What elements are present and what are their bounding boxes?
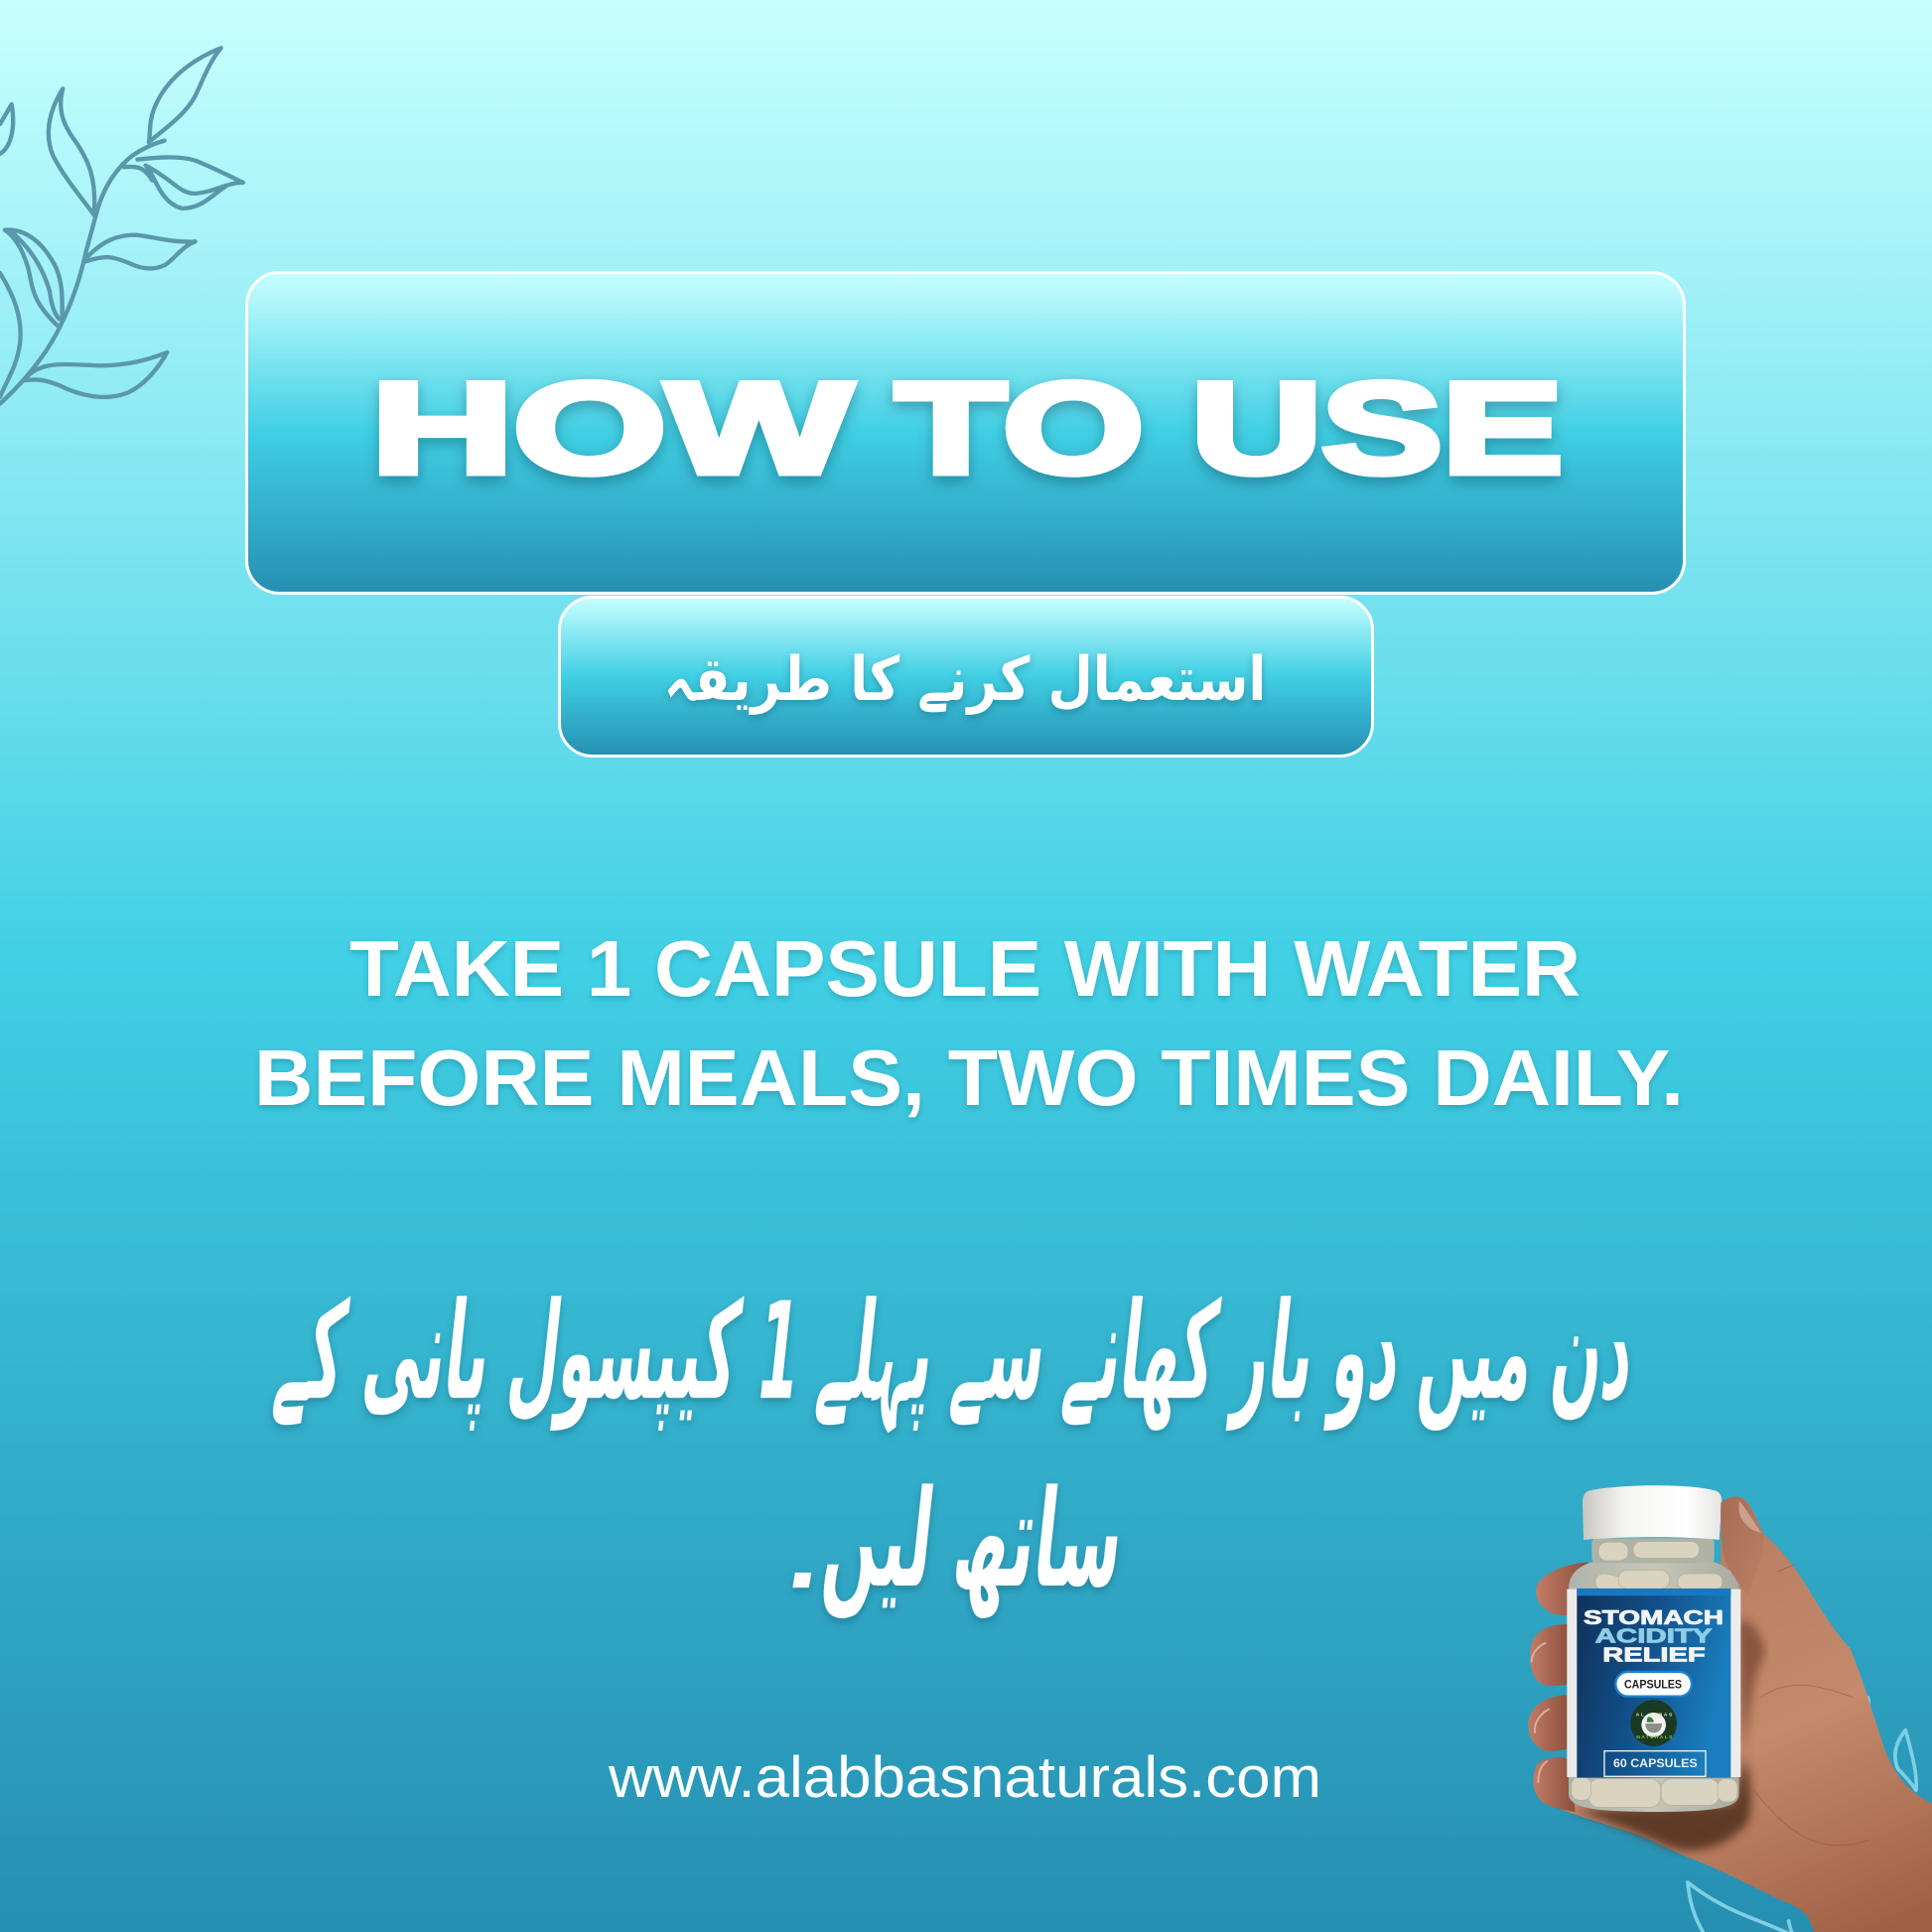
finger four [1533, 1757, 1576, 1812]
thumb nail [1739, 1501, 1761, 1533]
finger three [1528, 1695, 1571, 1751]
label box: 60 capsules: 60 CAPSULES [1613, 1756, 1698, 1770]
text block: English instructions: TAKE 1 CAPSULE WITH WATER [349, 924, 1581, 1013]
thumb over bottle [1721, 1497, 1764, 1595]
icon: decorative leaf branch top left [0, 48, 243, 404]
finger one [1536, 1562, 1588, 1615]
panel: Urdu subtitle box [560, 598, 1372, 757]
product label [1567, 1588, 1740, 1778]
label pill: capsules: CAPSULES [1624, 1677, 1682, 1691]
shadow under bottle [1572, 1757, 1751, 1851]
text block: Urdu instructions: ساتھ لیں۔ [779, 1461, 1131, 1618]
label title: RELIEF [1602, 1644, 1706, 1666]
bottle body [1569, 1562, 1739, 1812]
label pill: capsules [1615, 1672, 1692, 1697]
heading: HOW TO USE: TO [896, 355, 1144, 500]
heading: HOW TO USE: HOW [371, 355, 852, 500]
panel: HOW TO USE title box [246, 272, 1684, 594]
shadow beside bottle [1737, 1618, 1765, 1757]
image: hand holding product bottle [1528, 1485, 1932, 1932]
label title [1584, 1607, 1724, 1666]
icon: pale leaf outlines bottom right [1688, 1698, 1916, 1932]
text block: English instructions [254, 924, 1684, 1122]
text block: Urdu instructions [268, 1274, 1641, 1618]
fingernails [1532, 1643, 1549, 1782]
bottle cap [1583, 1485, 1722, 1540]
heading: Urdu subtitle: استعمال کرنے کا طریقہ [664, 644, 1266, 715]
heading: HOW TO USE: USE [1191, 355, 1563, 500]
hand palm [1556, 1497, 1932, 1932]
label box: 60 capsules [1604, 1751, 1706, 1776]
logo: Al Abbas Naturals: NATURALS [1636, 1734, 1673, 1740]
label title: STOMACH [1584, 1607, 1724, 1629]
text block: English instructions: BEFORE MEALS, TWO TIMES DAILY. [254, 1034, 1684, 1122]
heading: HOW TO USE [371, 355, 1563, 500]
logo: Al Abbas Naturals [1630, 1700, 1677, 1746]
palm crease lines [1754, 1566, 1869, 1846]
capsules [1572, 1542, 1737, 1807]
text block: Urdu instructions: دن میں دو بار کھانے سے پہلے 1 کیپسول پانی کے [268, 1274, 1641, 1434]
logo: Al Abbas Naturals: AL ABBAS [1636, 1712, 1673, 1718]
bottle neck [1591, 1538, 1715, 1563]
label title: ACIDITY [1595, 1626, 1713, 1648]
text: website URL: www.alabbasnaturals.com [608, 1745, 1321, 1810]
finger two [1530, 1624, 1571, 1686]
